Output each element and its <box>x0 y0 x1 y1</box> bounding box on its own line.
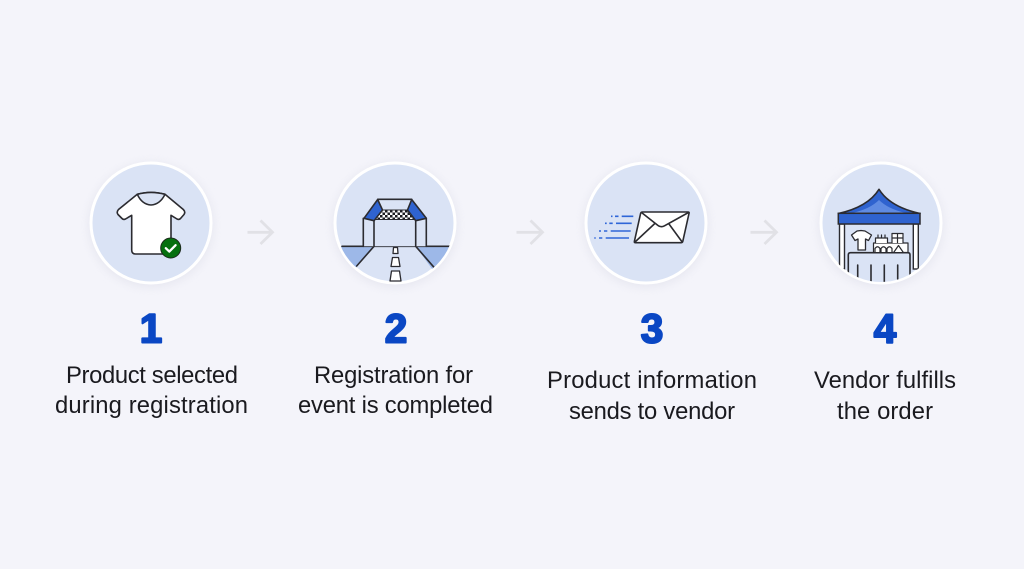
icon: vendor tent <box>819 163 943 287</box>
icon: finish line arch <box>333 163 457 287</box>
step 4: vendor fulfils <box>814 163 956 425</box>
number 3: 3 <box>641 306 663 352</box>
label 3 <box>547 367 757 425</box>
label 2: event is completed <box>298 392 493 419</box>
label 1 <box>55 362 248 419</box>
label 2 <box>298 362 493 419</box>
number 4: 4 <box>874 306 897 352</box>
label 1: during registration <box>55 392 248 419</box>
label 3: sends to vendor <box>569 398 735 425</box>
number 1: 1 <box>140 306 162 352</box>
label 1: Product selected <box>66 362 238 389</box>
arrow 1 <box>248 220 272 244</box>
label 4: Vendor fulfills <box>814 367 956 394</box>
icon: flying envelope <box>584 163 708 287</box>
step 3: information sent <box>547 163 757 425</box>
number 2: 2 <box>385 306 407 352</box>
icon: t-shirt with check badge <box>89 163 213 287</box>
arrow 2 <box>516 220 542 244</box>
step 1: product selected <box>55 163 248 419</box>
step 2: registration completed <box>298 163 493 419</box>
arrow 3 <box>750 220 776 244</box>
label 4 <box>814 367 956 425</box>
label 4: the order <box>837 398 933 425</box>
label 3: Product information <box>547 367 757 394</box>
label 2: Registration for <box>314 362 473 389</box>
